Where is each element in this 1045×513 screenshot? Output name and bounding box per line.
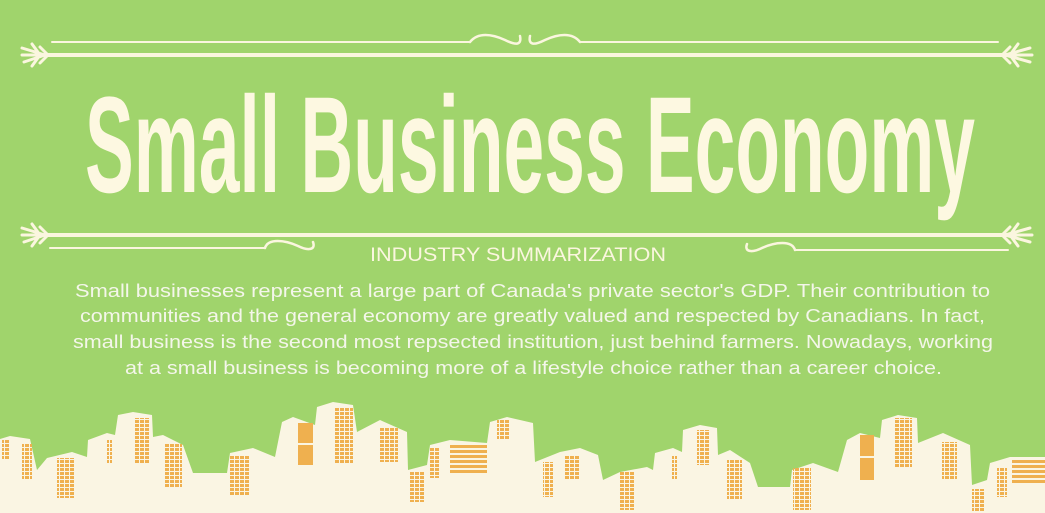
windows xyxy=(2,408,1007,512)
city skyline xyxy=(0,402,1045,513)
body text: communities and the general economy are greatly valued and respected by Canadians. In fact, xyxy=(80,305,985,326)
bottom ornamental border xyxy=(22,224,1032,251)
body text: Small businesses represent a large part of Canada's private sector's GDP. Their contribution to xyxy=(75,280,990,301)
top ornamental border xyxy=(22,35,1032,66)
subtitle: INDUSTRY SUMMARIZATION xyxy=(370,245,666,266)
body text: small business is the second most repsected institution, just behind farmers. Nowadays, working xyxy=(73,331,993,352)
body text xyxy=(73,280,993,378)
body text: at a small business is becoming more of a lifestyle choice rather than a career choice. xyxy=(125,357,942,378)
